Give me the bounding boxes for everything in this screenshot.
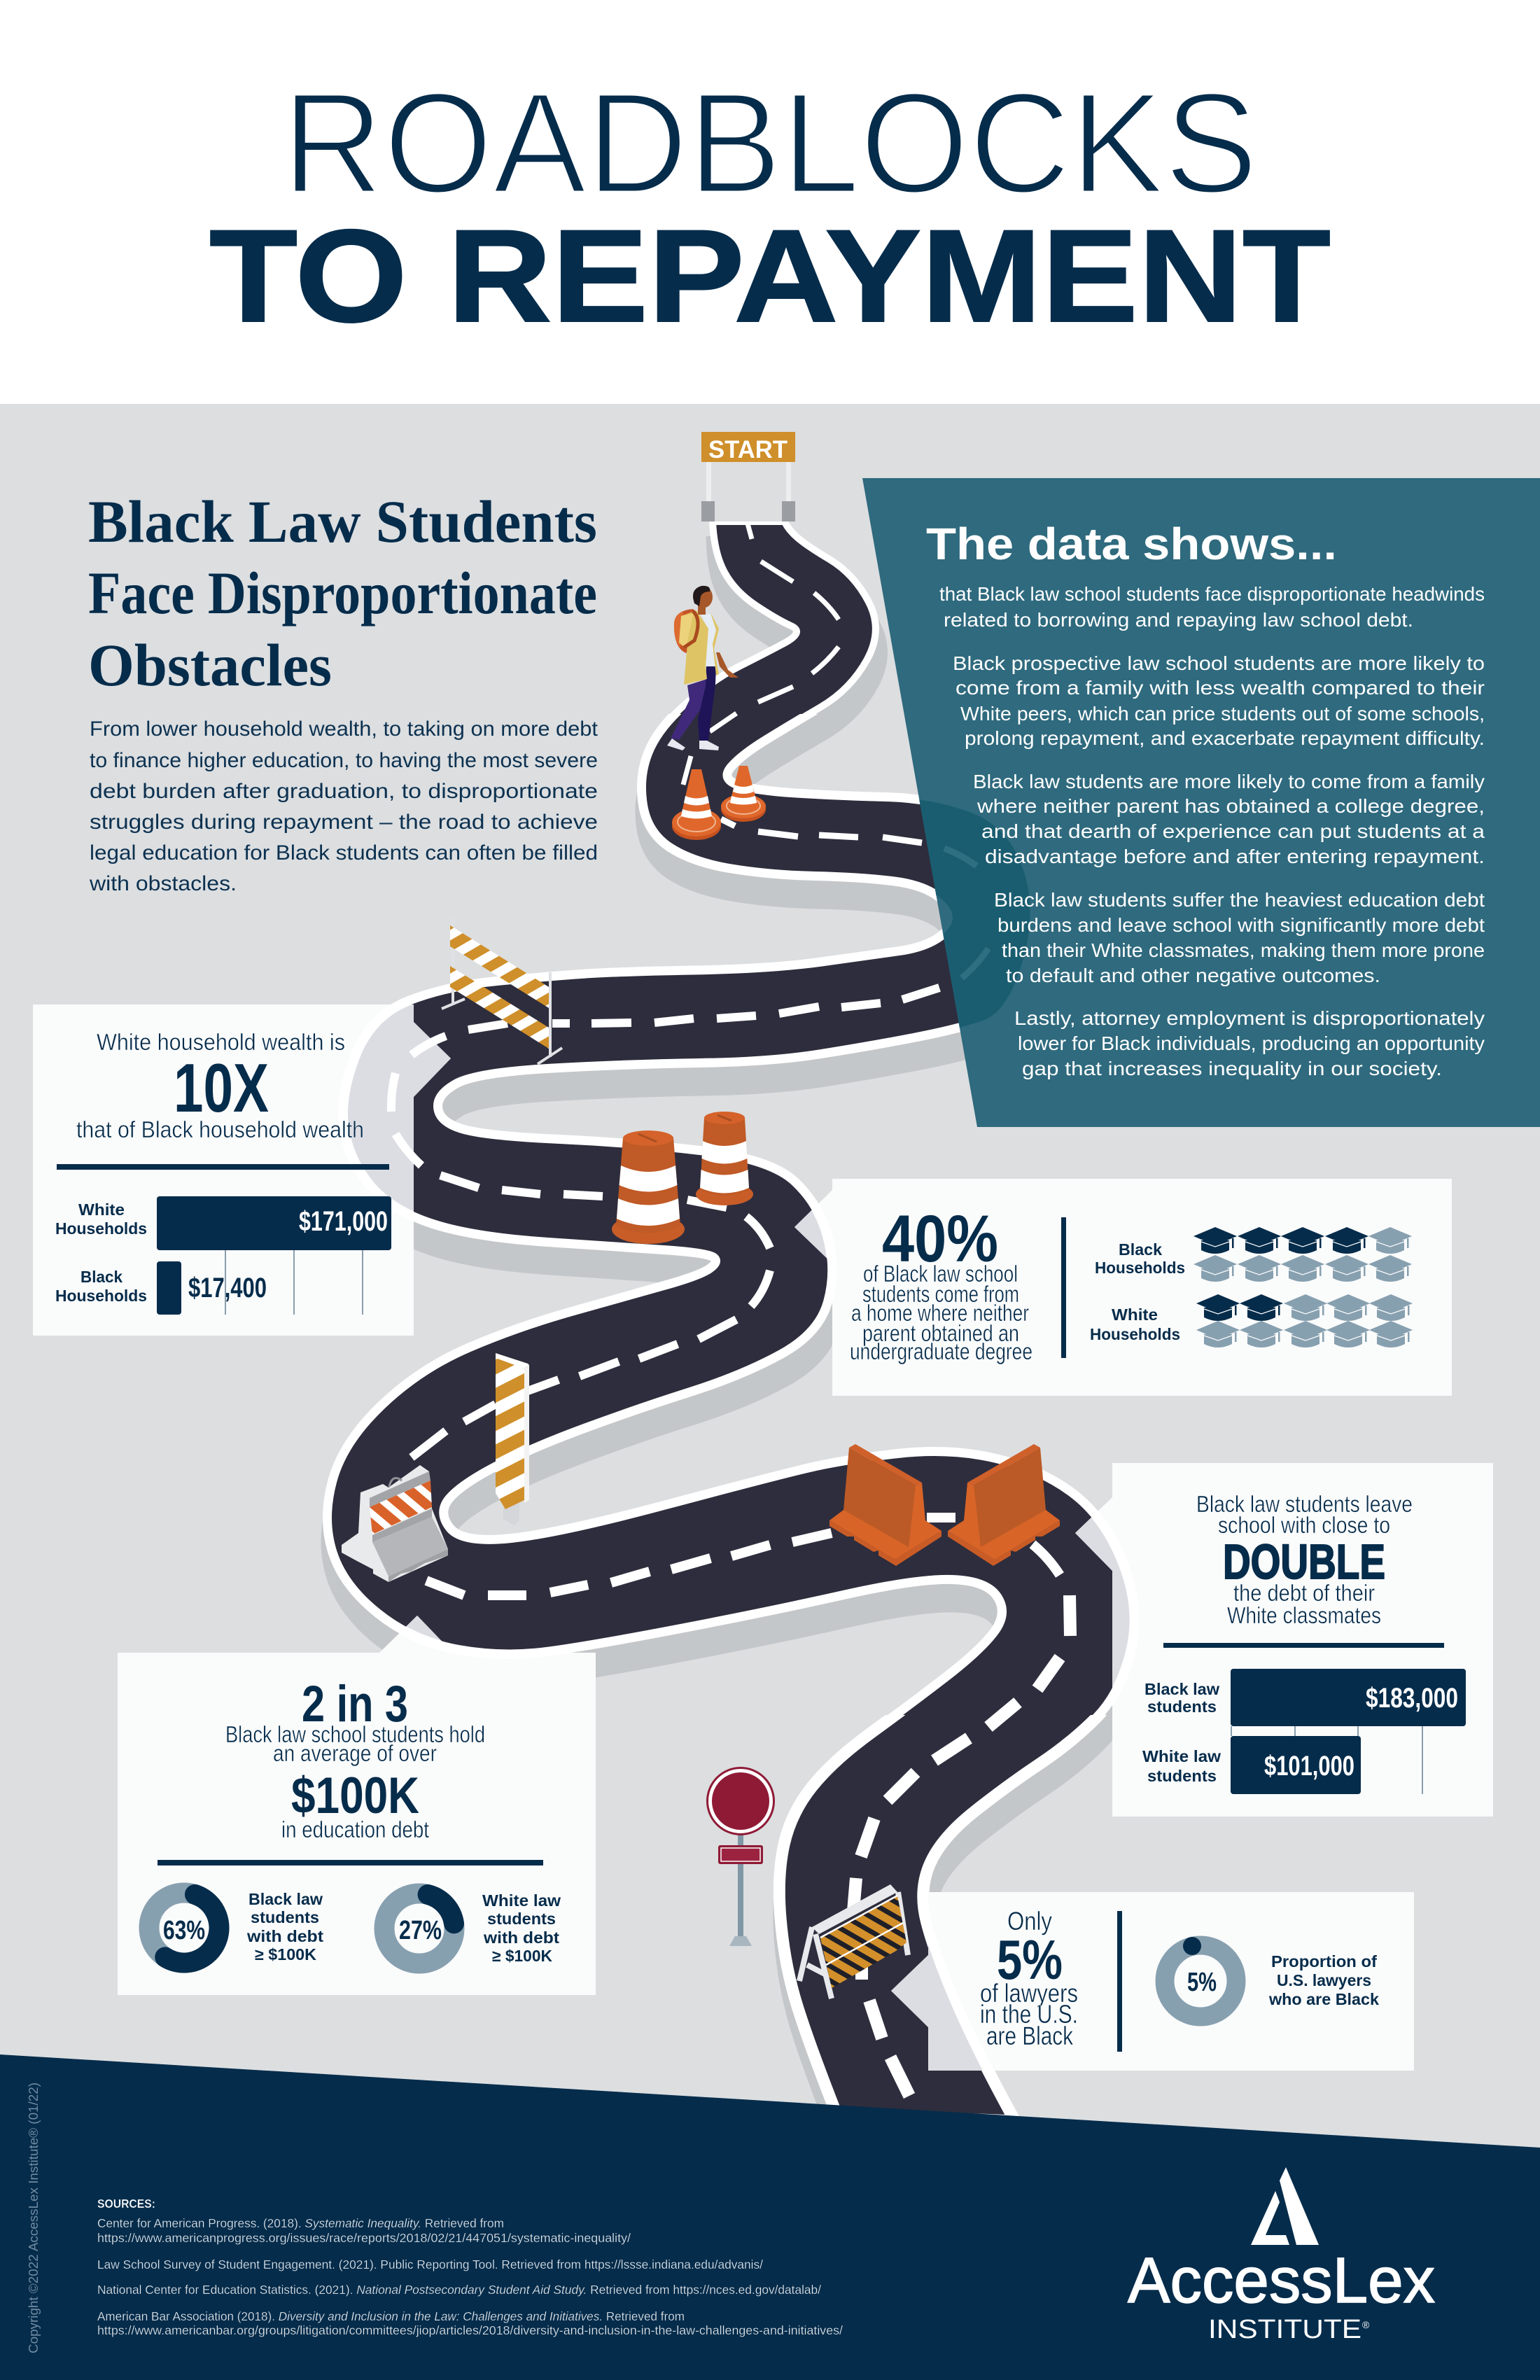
bar chart: debt: students: [1147, 1767, 1217, 1785]
bar chart: household wealth: $17,400: [188, 1273, 267, 1303]
sources: Law School Survey of Student Engagement. (2021). Public Reporting Tool. Retrieved from https://lssse.indiana.edu/advanis/: [97, 2258, 763, 2272]
stat text: double: DOUBLE: [1223, 1534, 1385, 1589]
text block: data paragraphs: Black law students suffer the heaviest education debt: [994, 889, 1485, 911]
bar chart: debt: $183,000: [1366, 1683, 1458, 1714]
text block: data paragraphs: where neither parent has obtained a college degree,: [976, 795, 1485, 817]
stat text: 10X: that of Black household wealth: [76, 1116, 364, 1142]
text block: data paragraphs: [939, 583, 1485, 1079]
text block: data paragraphs: White peers, which can price students out of some schools,: [960, 703, 1485, 724]
panel: 40 percent first generation: [850, 1202, 1413, 1364]
label: proportion of lawyers: U.S. lawyers: [1277, 1971, 1371, 1989]
stat text: double: Black law students leave: [1196, 1491, 1413, 1517]
stat text: 5%: Only: [1007, 1907, 1052, 1935]
heading: black law students: Obstacles: [88, 631, 332, 699]
icon: striped sawhorse barricade: [799, 1884, 908, 1998]
text block: data paragraphs: and that dearth of experience can put students at a: [981, 820, 1485, 842]
sources: Center for American Progress. (2018). Systematic Inequality. Retrieved from: [97, 2216, 504, 2230]
sources: National Center for Education Statistics. (2021). National Postsecondary Student Aid Study. Retrieved from https://nces.ed.gov/datalab/: [97, 2283, 821, 2297]
icon: striped barricade: [442, 918, 562, 1064]
logo: AccessLex Institute: ®: [1362, 2319, 1370, 2330]
label: black law students with debt: with debt: [246, 1927, 323, 1945]
label: white law students with debt: ≥ $100K: [492, 1947, 552, 1965]
sources: [97, 2197, 843, 2337]
label: black law students with debt: students: [251, 1908, 319, 1926]
label: proportion of lawyers: [1268, 1952, 1379, 2008]
start sign: START: [708, 436, 788, 463]
icon: traffic cones: [672, 766, 766, 840]
text block: data paragraphs: prolong repayment, and exacerbate repayment difficulty.: [965, 727, 1485, 749]
sources: American Bar Association (2018). Diversity and Inclusion in the Law: Challenges and Initiatives. Retrieved from: [97, 2309, 685, 2323]
intro paragraph: with obstacles.: [89, 872, 237, 895]
stat text: 2 in 3 and $100K: 2 in 3: [302, 1676, 408, 1732]
donut: 27%: [377, 1886, 462, 1971]
text block: data paragraphs: disadvantage before and after entering repayment.: [985, 846, 1485, 867]
stat text: 10X: White household wealth is: [97, 1029, 345, 1055]
stat text: double: school with close to: [1218, 1512, 1390, 1538]
start sign: [701, 432, 795, 522]
donut: 63%: [140, 1884, 228, 1972]
label: black law students with debt: Black law: [248, 1890, 323, 1908]
stat text: 5%: [980, 1907, 1078, 2050]
stat text: 40%: students come from: [862, 1281, 1019, 1307]
labels: households: Households: [1090, 1325, 1180, 1343]
intro paragraph: From lower household wealth, to taking on more debt: [90, 718, 598, 741]
panel: 2 in 3: [140, 1676, 561, 1972]
stat text: 40%: of Black law school: [863, 1261, 1018, 1287]
bar chart: debt: [1142, 1669, 1466, 1794]
heading: the data shows: The data shows...: [926, 519, 1337, 569]
bar chart: household wealth: Black: [80, 1268, 122, 1286]
stat text: 40%: [850, 1202, 1032, 1364]
bar chart: household wealth: Households: [55, 1287, 147, 1305]
text block: data paragraphs: gap that increases inequality in our society.: [1022, 1058, 1442, 1079]
heading: black law students: Black Law Students: [88, 488, 597, 555]
panels behind road tint: [33, 1004, 1493, 2071]
labels: households: Black: [1119, 1240, 1162, 1259]
stat text: 5%: 5%: [997, 1928, 1063, 1991]
intro paragraph: struggles during repayment – the road to achieve: [90, 811, 598, 834]
sources: https://www.americanbar.org/groups/litigation/committees/jiop/articles/2018/diversity-and-inclusion-in-the-law-challenges-and-initiatives/: [97, 2323, 843, 2337]
stat text: double: the debt of their: [1233, 1580, 1375, 1606]
text block: data paragraphs: Lastly, attorney employment is disproportionately: [1014, 1007, 1485, 1029]
panel: 5 percent of lawyers: [980, 1907, 1379, 2052]
winding road: [328, 522, 1138, 2145]
bar chart: household wealth: $171,000: [299, 1206, 388, 1237]
icon: concrete barrier: [342, 1465, 448, 1582]
stat text: 10X: [76, 1029, 364, 1142]
heading: black law students: [88, 488, 597, 699]
stat text: 2 in 3 and $100K: [225, 1676, 485, 1842]
title: [209, 63, 1331, 349]
text block: data paragraphs: lower for Black individuals, producing an opportunity: [1018, 1032, 1485, 1054]
sources: SOURCES:: [97, 2197, 155, 2211]
text block: data paragraphs: related to borrowing and repaying law school debt.: [944, 609, 1413, 631]
label: proportion of lawyers: Proportion of: [1271, 1952, 1377, 1970]
panel: double the debt: [1142, 1491, 1466, 1794]
stat text: 2 in 3 and $100K: an average of over: [273, 1740, 437, 1766]
donut: 5%: 5%: [1187, 1968, 1217, 1997]
stat text: 5%: in the U.S.: [980, 2000, 1078, 2029]
intro paragraph: debt burden after graduation, to disproportionate: [90, 780, 598, 803]
intro paragraph: to finance higher education, to having the most severe: [90, 749, 598, 772]
donut: 63%: 63%: [163, 1916, 205, 1945]
labels: households: White: [1112, 1306, 1158, 1324]
stat text: 40%: 40%: [882, 1202, 998, 1276]
stat text: 2 in 3 and $100K: $100K: [291, 1768, 419, 1824]
text block: data paragraphs: to default and other negative outcomes.: [1006, 965, 1380, 986]
stat text: 10X: 10X: [174, 1049, 269, 1126]
title: TO REPAYMENT: [209, 202, 1331, 349]
label: proportion of lawyers: who are Black: [1268, 1990, 1379, 2008]
stat text: double: [1196, 1491, 1413, 1628]
label: white law students with debt: with debt: [483, 1928, 559, 1947]
label: white law students with debt: students: [487, 1910, 556, 1928]
bar chart: debt: $101,000: [1264, 1751, 1354, 1782]
bar chart: debt: Black law: [1144, 1680, 1219, 1698]
stat text: 5%: of lawyers: [980, 1979, 1078, 2008]
donut: 27%: 27%: [399, 1916, 442, 1945]
icon: striped vertical marker: [496, 1353, 529, 1525]
intro paragraph: legal education for Black students can often be filled: [90, 841, 598, 864]
labels: households: Households: [1095, 1259, 1185, 1277]
logo: AccessLex Institute: AccessLex: [1128, 2245, 1435, 2316]
heading: black law students: Face Disproportionate: [88, 559, 597, 626]
label: black law students with debt: [246, 1890, 323, 1963]
stat text: 40%: parent obtained an: [862, 1320, 1019, 1346]
stat text: double: White classmates: [1227, 1602, 1381, 1628]
logo: AccessLex Institute: [1128, 2167, 1435, 2344]
labels: households: [1090, 1240, 1185, 1343]
panel: white household wealth: [55, 1029, 391, 1315]
label: white law students with debt: [482, 1891, 561, 1965]
text block: data paragraphs: that Black law school students face disproportionate headwinds: [939, 583, 1485, 605]
label: white law students with debt: White law: [482, 1891, 561, 1910]
bar chart: household wealth: Households: [55, 1219, 147, 1238]
text block: data paragraphs: burdens and leave school with significantly more debt: [997, 914, 1485, 936]
stat text: 40%: a home where neither: [851, 1300, 1029, 1326]
stat text: 2 in 3 and $100K: Black law school students hold: [225, 1721, 485, 1747]
icon: round road sign: [707, 1768, 774, 1946]
icon: student walking: [667, 586, 738, 750]
stat text: 40%: undergraduate degree: [850, 1338, 1032, 1364]
bar chart: household wealth: White: [78, 1200, 125, 1219]
text block: data paragraphs: Black law students are more likely to come from a family: [973, 771, 1485, 792]
stat text: 2 in 3 and $100K: in education debt: [281, 1816, 429, 1842]
label: black law students with debt: ≥ $100K: [255, 1945, 316, 1963]
copyright: Copyright ©2022 AccessLex Institute® (01/22): [27, 2082, 41, 2353]
bar chart: household wealth: [55, 1196, 391, 1315]
panel: data shows: [862, 478, 1540, 1127]
logo: AccessLex Institute: INSTITUTE: [1208, 2315, 1362, 2344]
sources: https://www.americanprogress.org/issues/race/reports/2018/02/21/447051/systematic-inequality/: [97, 2231, 631, 2245]
icon array: graduation caps: [1194, 1227, 1413, 1348]
title: ROADBLOCKS: [282, 63, 1258, 223]
bar chart: debt: White law: [1142, 1747, 1221, 1765]
intro paragraph: [89, 718, 598, 895]
footer band: [0, 2054, 1540, 2380]
icon: traffic barrels: [612, 1112, 753, 1244]
text block: data paragraphs: Black prospective law school students are more likely to: [953, 652, 1485, 674]
stat text: 5%: are Black: [986, 2022, 1073, 2050]
text block: data paragraphs: come from a family with less wealth compared to their: [955, 677, 1485, 699]
icon: orange jersey barriers: [830, 1444, 1060, 1566]
donut: 5%: [1165, 1937, 1236, 2017]
bar chart: debt: students: [1147, 1698, 1217, 1716]
text block: data paragraphs: than their White classmates, making them more prone: [1002, 939, 1485, 961]
